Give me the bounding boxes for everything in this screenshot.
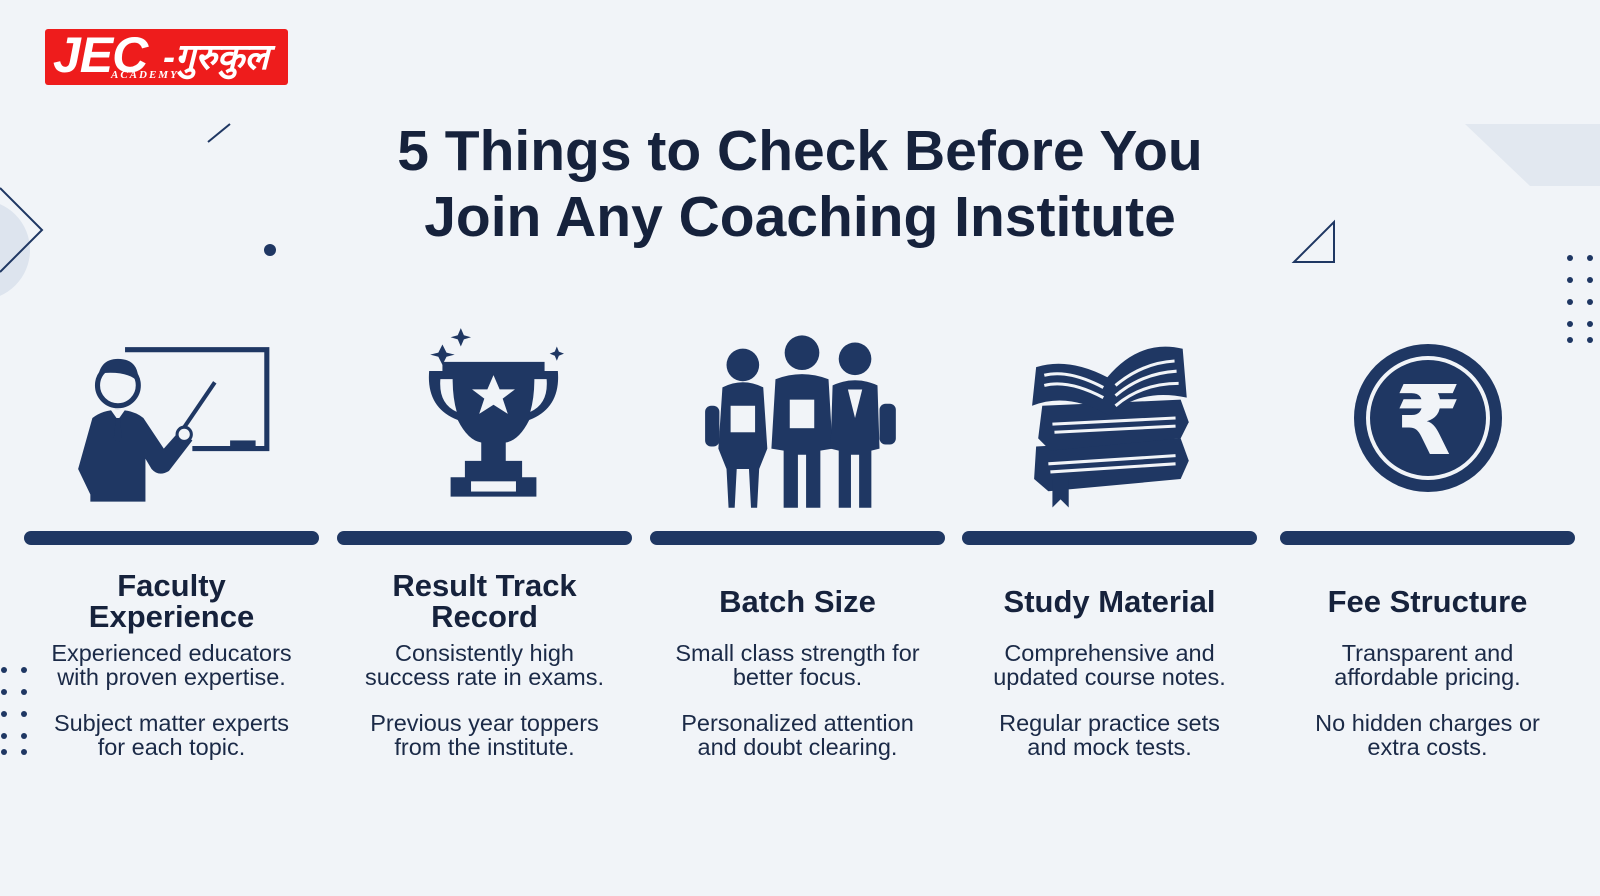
panel: study material: Regular practice sets [999, 710, 1220, 736]
icon: students group [705, 335, 896, 508]
panel: batch size [650, 531, 945, 760]
panel: study material [962, 531, 1257, 760]
panel: fee structure: extra costs. [1367, 734, 1488, 760]
panel: batch size: Batch Size [719, 584, 876, 619]
panel: fee structure: No hidden charges or [1315, 710, 1540, 736]
panel: fee structure: Fee Structure [1328, 584, 1527, 619]
panel: study material: and mock tests. [1027, 734, 1192, 760]
icon: rupee coin: ₹ [1395, 365, 1461, 477]
panel: fee structure: affordable pricing. [1334, 664, 1521, 690]
panel: result track record: Consistently high [395, 640, 574, 666]
panel: faculty experience: Subject matter experts [54, 710, 289, 736]
panel: batch size: Personalized attention [681, 710, 914, 736]
panel: study material: Comprehensive and [1004, 640, 1215, 666]
panel: faculty experience: for each topic. [98, 734, 245, 760]
panel: study material: updated course notes. [993, 664, 1226, 690]
icon: books [1032, 346, 1189, 508]
logo [45, 29, 288, 85]
panel: faculty experience: Experienced educators [51, 640, 292, 666]
panel: fee structure: Transparent and [1342, 640, 1513, 666]
icon: rupee coin [1354, 344, 1502, 492]
panel: result track record: success rate in exams. [365, 664, 604, 690]
title: 5 Things to Check Before You [397, 119, 1203, 183]
logo: JEC [53, 27, 147, 83]
panel: batch size: Small class strength for [675, 640, 920, 666]
logo: -गुरुकुल [163, 36, 269, 77]
title [397, 119, 1203, 249]
logo: ACADEMY [111, 69, 179, 81]
panel: faculty experience [24, 531, 319, 760]
panel: result track record: from the institute. [394, 734, 575, 760]
panel: faculty experience: with proven expertise. [57, 664, 286, 690]
icon: trophy [428, 328, 564, 497]
panel: faculty experience: Faculty [117, 568, 226, 603]
title: Join Any Coaching Institute [424, 185, 1176, 249]
panel: batch size: better focus. [733, 664, 862, 690]
panel: batch size: and doubt clearing. [698, 734, 897, 760]
panel: result track record: Result Track [392, 568, 577, 603]
panel: study material: Study Material [1004, 584, 1215, 619]
panel: result track record: Previous year toppers [370, 710, 599, 736]
panel: fee structure [1280, 531, 1575, 760]
icon: teacher at board [78, 347, 270, 502]
panel: faculty experience: Experience [89, 599, 254, 634]
panel: result track record: Record [431, 599, 538, 634]
panel: result track record [337, 531, 632, 760]
